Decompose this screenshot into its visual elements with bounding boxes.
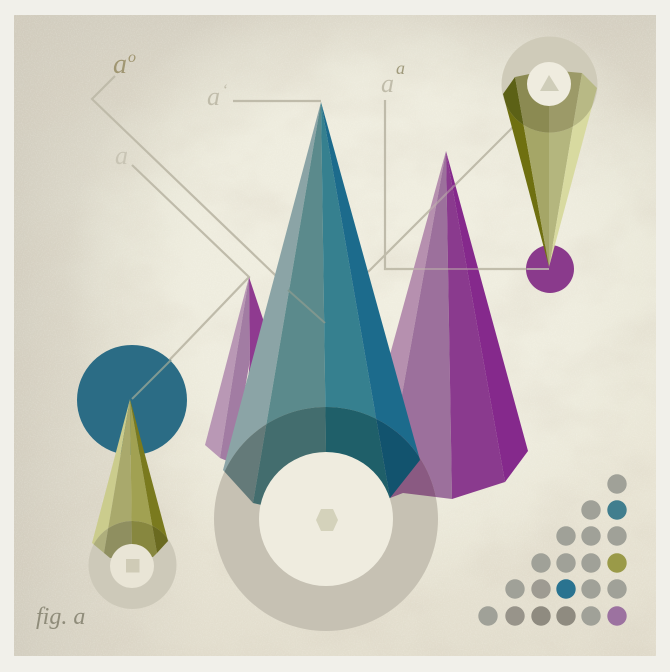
- lower ring centre disc: [110, 544, 154, 588]
- lower ring: [88, 521, 176, 609]
- leader over purple circle: [527, 268, 549, 270]
- leader lines: [92, 76, 549, 399]
- label: a degree: a: [113, 49, 127, 80]
- icon: triangle: [540, 75, 559, 91]
- top olive cone: [503, 70, 597, 267]
- icon: square: [126, 559, 140, 572]
- leader over teal circle: [132, 360, 171, 399]
- big teal cone: [223, 102, 420, 520]
- tall purple cone: [372, 151, 549, 499]
- large ring centre disc: [259, 452, 393, 586]
- lower olive cone: [92, 399, 168, 558]
- caption: fig. a: [36, 604, 85, 630]
- label: a: a: [115, 141, 128, 170]
- label: a superscript a: a: [396, 58, 405, 78]
- dot grid: [478, 474, 627, 626]
- label: a prime: ‘: [222, 82, 227, 99]
- ring overlap with cones: [224, 407, 436, 505]
- small purple cone: [205, 277, 270, 463]
- top ring: [502, 36, 598, 132]
- icon: hexagon: [316, 509, 338, 531]
- label: a degree: o: [128, 49, 136, 66]
- purple circle: [526, 245, 574, 293]
- teal circle: [77, 345, 187, 455]
- top ring centre disc: [527, 62, 571, 106]
- label: a superscript a: a: [381, 69, 394, 98]
- label: a prime: a: [207, 82, 220, 111]
- large ring: [214, 407, 438, 631]
